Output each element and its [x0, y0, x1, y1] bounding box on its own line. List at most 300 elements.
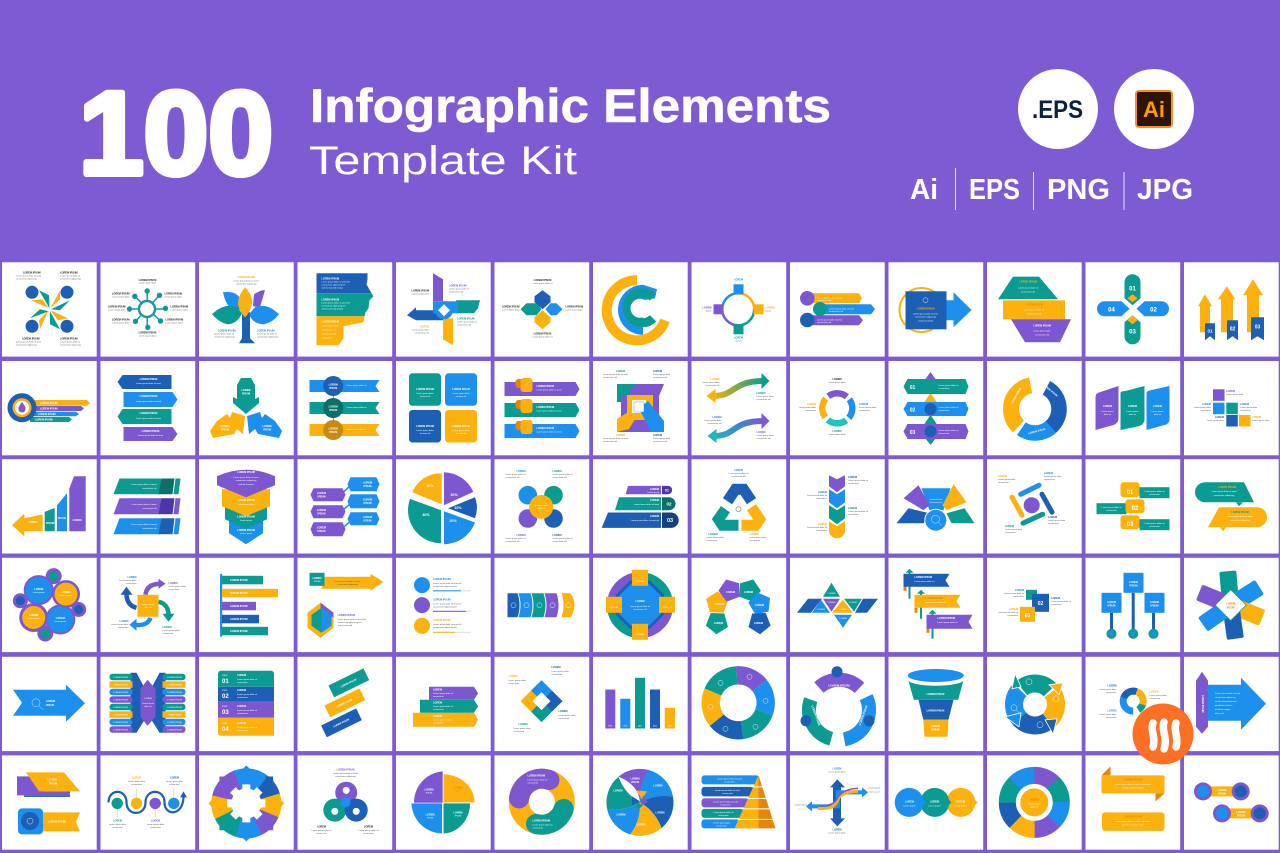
panel: four arc ring: [790, 361, 885, 455]
labels: dolor sit: [144, 705, 152, 708]
diagram: [120, 579, 174, 631]
panel: three rising arrows: [1184, 262, 1279, 357]
numbers: [1207, 324, 1260, 333]
captions: LOREM: [508, 675, 518, 678]
captions: Lorem ipsum dolor: [756, 434, 774, 437]
captions: LOREM IPSUM: [416, 388, 434, 391]
captions: consectetur: [706, 539, 718, 542]
captions: LOREM IPSUM: [536, 427, 554, 430]
labels: consectetur: [1051, 603, 1062, 606]
captions: [1099, 684, 1167, 719]
labels: LOREM IPSUM: [340, 678, 357, 689]
captions: Lorem ipsum: [1126, 410, 1139, 413]
diagram: [900, 288, 972, 332]
captions: LOREM: [516, 534, 526, 537]
captions: Lorem ipsum dolor sit: [346, 428, 367, 431]
chart: ring: [816, 387, 858, 429]
panel: overlapping squares: [987, 558, 1082, 652]
captions: LOREM: [832, 767, 842, 770]
captions: LOREM: [712, 416, 722, 419]
captions: Lorem ipsum: [535, 504, 547, 507]
captions: Lorem ipsum dolor sit amet: [136, 417, 161, 420]
labels: LOREM IPSUM: [230, 618, 248, 621]
labels: LOREM IPSUM: [927, 693, 944, 696]
captions: sit amet elit: [420, 395, 431, 398]
captions: Lorem ipsum: [1151, 410, 1164, 413]
caption: sed do eiusmod: [918, 320, 934, 322]
labels: LOREM: [1107, 601, 1116, 604]
captions: [1194, 390, 1270, 422]
captions: consectetur adipiscing elit: [433, 585, 457, 588]
captions: LOREM: [766, 306, 775, 309]
labels: consectetur: [938, 432, 950, 435]
panel: circle with four bars: [987, 459, 1082, 554]
captions: consectetur elit: [143, 527, 157, 530]
labels: consectetur: [1106, 509, 1117, 512]
captions: Lorem ipsum dolor sit amet: [131, 503, 157, 506]
captions: consectetur: [1044, 478, 1055, 481]
captions: [1018, 280, 1051, 336]
numbers: 03: [1255, 324, 1260, 330]
labels: 01: [1127, 490, 1134, 496]
center label: IPSUM: [1227, 606, 1235, 609]
values: [608, 725, 672, 727]
labels: [424, 786, 463, 819]
panel: three overlapping circles: [888, 755, 983, 850]
captions: LOREM: [848, 507, 857, 510]
labels: LOREM: [237, 705, 246, 708]
diagram: [310, 477, 380, 536]
captions: consectetur elit: [552, 476, 567, 479]
panel: exploded pie chart: [396, 459, 491, 554]
captions: Lorem ipsum dolor sit: [848, 479, 868, 482]
diagram: [895, 788, 978, 817]
labels: Lorem ipsum dolor sit: [1145, 522, 1165, 525]
captions: Lorem ipsum dolor sit: [938, 621, 958, 624]
captions: [322, 277, 350, 339]
captions: consectetur: [1200, 409, 1211, 412]
labels: consectetur: [722, 792, 733, 795]
captions: Lorem ipsum dolor sit: [528, 778, 548, 781]
labels: [910, 384, 959, 436]
captions: LOREM IPSUM: [170, 305, 188, 308]
labels: LOREM: [47, 778, 57, 781]
labels: Lorem ipsum dolor sit: [237, 678, 257, 681]
labels: consectetur: [1013, 595, 1024, 598]
captions: LOREM: [1107, 709, 1116, 712]
captions: Lorem ipsum dolor sit: [433, 718, 453, 721]
captions: consectetur elit: [732, 475, 746, 478]
panel: circle cluster: [2, 558, 97, 652]
panel: trapezoid with circle: [888, 459, 983, 554]
chart: donut: [512, 772, 571, 831]
labels: LOREM IPSUM: [167, 729, 182, 731]
captions: consectetur elit: [1035, 333, 1049, 336]
numbers: 02: [1230, 326, 1235, 332]
labels: LOREM IPSUM: [113, 684, 128, 686]
labels: [714, 591, 764, 625]
captions: [508, 666, 576, 733]
captions: consectetur elit: [653, 440, 667, 443]
captions: [536, 385, 562, 434]
captions: LOREM IPSUM: [1025, 303, 1043, 306]
diagram: gradient arrows: [706, 373, 770, 443]
captions: Ipsum: [706, 310, 712, 312]
captions: LOREM: [807, 403, 816, 406]
diagram: [904, 569, 972, 639]
diagram: [797, 583, 878, 628]
captions: LOREM IPSUM: [22, 337, 40, 340]
captions: LOREM IPSUM: [35, 418, 53, 422]
panel: three arrows in triangle: [199, 361, 294, 455]
captions: consectetur elit: [506, 540, 520, 543]
chart: C arcs: [607, 280, 665, 340]
captions: consectetur: [169, 783, 180, 786]
captions: LOREM: [56, 617, 65, 620]
diagram: [504, 378, 580, 438]
captions: Lorem ipsum dolor: [558, 714, 576, 717]
captions: LOREM IPSUM: [142, 430, 159, 433]
chart: bars: [12, 476, 86, 536]
diagram: [606, 570, 675, 640]
diagram: [702, 775, 776, 828]
captions: Lorem ipsum dolor sit: [807, 526, 827, 529]
panel: nested square with arrows: [593, 361, 688, 455]
labels: LOREM IPSUM: [230, 579, 248, 582]
captions: LOREM IPSUM: [1019, 280, 1037, 283]
center label: dolor sit: [1031, 805, 1038, 808]
captions: Lorem ipsum dolor sit amet: [536, 410, 562, 412]
captions: LOREM: [750, 533, 759, 536]
captions: [799, 378, 877, 436]
labels: LOREM: [754, 622, 763, 625]
labels: LOREM: [630, 777, 640, 780]
captions: consectetur adipiscing elit: [338, 621, 362, 624]
diagram: [1096, 482, 1170, 530]
captions: consectetur elit: [756, 398, 771, 401]
labels: LOREM IPSUM: [1201, 695, 1204, 713]
diagram: [413, 687, 478, 727]
captions: consectetur: [805, 409, 816, 412]
labels: consectetur: [1149, 525, 1160, 528]
panel: big arrow with vertical label: [1184, 657, 1279, 751]
diagram: [718, 489, 760, 525]
labels: LOREM IPSUM: [167, 707, 182, 709]
captions: [807, 476, 868, 532]
captions: Lorem ipsum dolor sit: [312, 829, 332, 832]
labels: IPSUM: [49, 782, 57, 785]
labels: [230, 579, 248, 633]
captions: sed do eiusmod tempor: [1122, 786, 1144, 789]
diagram: [998, 277, 1071, 342]
labels: [1217, 789, 1246, 817]
captions: LOREM IPSUM: [528, 774, 545, 777]
captions: LOREM IPSUM: [322, 277, 339, 280]
captions: Lorem ipsum dolor sit amet: [603, 437, 628, 440]
captions: consectetur: [363, 832, 374, 835]
panel: hub and spokes: [100, 262, 195, 357]
panel: three slanted cards: [1086, 361, 1180, 455]
captions: Lorem ipsum dolor sit amet: [1227, 515, 1253, 518]
labels: LOREM IPSUM: [230, 605, 248, 608]
captions: LOREM: [1202, 403, 1211, 406]
captions: Lorem ipsum: [868, 790, 880, 793]
center label: [1226, 602, 1235, 609]
captions: LOREM: [616, 370, 625, 373]
panel: six pentagons: [692, 558, 786, 652]
captions: LOREM IPSUM: [140, 395, 157, 398]
captions: LOREM: [241, 389, 251, 392]
captions: consectetur: [126, 582, 137, 585]
captions: [329, 384, 367, 434]
labels: 03: [222, 710, 229, 716]
captions: LOREM IPSUM: [237, 499, 255, 502]
labels: LOREM: [1129, 581, 1138, 584]
labels: LOREM: [144, 698, 152, 700]
captions: LOREM IPSUM: [536, 406, 554, 409]
labels: LOREM: [650, 515, 659, 518]
diagram: [1005, 674, 1065, 734]
labels: LOREM: [363, 516, 372, 519]
header: [79, 68, 1194, 210]
chart: wheel: [208, 765, 284, 841]
captions: IPSUM: [329, 387, 337, 390]
panel: concentric target bars: [2, 361, 97, 455]
labels: 03: [667, 518, 673, 524]
captions: LOREM: [956, 800, 965, 803]
numbers: 02: [1150, 307, 1157, 313]
labels: consectetur: [237, 712, 248, 715]
captions: LOREM: [1150, 690, 1159, 693]
captions: Lorem ipsum dolor: [162, 629, 180, 632]
labels: LOREM: [363, 482, 372, 485]
panel: four hexagon arrows: [494, 262, 589, 357]
captions: Lorem ipsum dolor: [998, 478, 1016, 481]
labels: LOREM IPSUM: [167, 722, 182, 724]
badge: orange logo: [1132, 704, 1194, 764]
labels: LOREM: [655, 811, 665, 814]
captions: LOREM IPSUM: [1218, 486, 1236, 489]
panel: offset quadrant pie: [396, 755, 491, 850]
labels: 03: [1127, 522, 1134, 528]
labels: IPSUM: [58, 517, 66, 520]
diagram: [1012, 485, 1052, 523]
captions: Ipsum: [766, 310, 771, 312]
captions: consectetur adipiscing elit: [433, 605, 457, 608]
captions: consectetur elit: [449, 290, 463, 293]
labels: [47, 778, 66, 823]
labels: [817, 593, 857, 620]
captions: LOREM: [516, 470, 526, 473]
captions: consectetur: [1150, 697, 1161, 700]
diagram: [617, 384, 664, 432]
panel: growing bars with arrow: [2, 459, 97, 554]
captions: LOREM: [433, 701, 442, 704]
labels: LOREM IPSUM: [113, 677, 128, 679]
labels: LOREM: [425, 813, 435, 816]
labels: LOREM: [839, 618, 847, 620]
captions: [903, 800, 967, 807]
captions: LOREM IPSUM: [534, 279, 551, 282]
captions: Lorem ipsum dolor: [139, 334, 156, 337]
panel: two S arrows: [692, 361, 786, 455]
captions: LOREM: [610, 607, 618, 609]
captions: Lorem ipsum dolor sit amet elit: [338, 618, 366, 621]
captions: LOREM: [708, 533, 718, 536]
captions: Lorem ipsum dolor: [1005, 528, 1023, 531]
label: LOREM: [46, 700, 55, 703]
diagram: head: [316, 273, 374, 345]
captions: LOREM IPSUM: [452, 425, 470, 428]
labels: [333, 678, 357, 729]
diagram: [1097, 274, 1169, 344]
captions: Lorem ipsum dolor sit: [532, 823, 553, 826]
captions: LOREM IPSUM: [322, 298, 339, 301]
captions: Lorem ipsum dolor sit amet elit: [322, 301, 350, 304]
labels: Lorem ipsum dolor sit: [1004, 592, 1024, 595]
labels: LOREM: [317, 509, 326, 512]
labels: LOREM: [453, 786, 463, 789]
diagram: [118, 375, 178, 441]
diagram: hub: [127, 288, 168, 330]
captions: LOREM IPSUM: [140, 378, 157, 381]
diagram: [13, 568, 86, 642]
captions: consectetur adipiscing: [1230, 519, 1251, 522]
captions: LOREM: [832, 378, 842, 381]
captions: LOREM: [636, 634, 644, 636]
captions: Lorem ipsum dolor sit amet: [233, 279, 259, 282]
labels: [1102, 490, 1165, 528]
labels: incididunt ut labore: [1215, 704, 1233, 707]
captions: Lorem ipsum: [903, 804, 916, 807]
captions: Lorem ipsum dolor: [828, 770, 846, 773]
panel: four tag bars: [100, 361, 195, 455]
panel: three trapezoids: [987, 262, 1082, 357]
captions: LOREM: [710, 378, 720, 381]
captions: Lorem ipsum: [1101, 410, 1114, 413]
captions: Ipsum: [736, 340, 742, 342]
captions: LOREM: [552, 666, 561, 669]
captions: LOREM: [518, 723, 528, 726]
captions: LOREM IPSUM: [166, 318, 183, 321]
panel: butterfly pill lists: [100, 657, 195, 751]
captions: LOREM IPSUM: [23, 271, 41, 274]
captions: consectetur: [1005, 531, 1016, 534]
captions: Lorem ipsum dolor: [704, 419, 722, 422]
values: 20%: [623, 725, 628, 727]
labels: LOREM: [726, 591, 735, 594]
diagram: [896, 484, 974, 531]
captions: consectetur adipiscing elit: [322, 283, 346, 286]
labels: STEP: [222, 675, 228, 677]
labels: LOREM: [755, 604, 764, 607]
captions: LOREM: [329, 428, 338, 430]
labels: Lorem ipsum dolor sit: [1051, 600, 1071, 603]
captions: LOREM: [317, 825, 326, 828]
title: Infographic Elements: [310, 80, 831, 133]
captions: LOREM: [220, 425, 230, 428]
labels: Lorem ipsum dolor sit: [938, 384, 959, 387]
labels: LOREM IPSUM: [230, 630, 248, 633]
captions: LOREM: [34, 588, 43, 591]
panel: stacked shield funnel: [199, 459, 294, 554]
captions: Lorem ipsum dolor sit amet elit: [322, 280, 350, 283]
labels: consectetur: [938, 409, 950, 412]
panel: donut chart: [692, 657, 786, 751]
captions: consectetur: [112, 826, 123, 829]
captions: LOREM: [151, 819, 160, 822]
captions: consectetur adipiscing: [335, 775, 357, 778]
captions: Lorem ipsum dolor: [170, 308, 188, 311]
captions: LOREM IPSUM: [914, 576, 932, 579]
labels: LOREM IPSUM: [113, 699, 128, 701]
captions: Lorem ipsum dolor: [119, 579, 137, 582]
center label: LOREM: [1226, 602, 1235, 605]
diagram: [414, 577, 471, 634]
badge: EPS: [1018, 69, 1098, 149]
labels: IPSUM: [318, 513, 325, 516]
captions: LOREM IPSUM: [534, 332, 551, 335]
values: 30%: [653, 725, 657, 727]
dots: [800, 666, 874, 726]
captions: consectetur elit: [457, 323, 471, 326]
captions: consectetur adipiscing: [337, 583, 359, 586]
captions: consectetur adipiscing: [236, 282, 257, 285]
labels: LOREM: [1009, 608, 1018, 611]
captions: LOREM: [734, 278, 743, 281]
chart: pie: [412, 771, 474, 833]
labels: Lorem ipsum dolor sit: [1102, 506, 1122, 509]
captions: consectetur: [552, 673, 563, 676]
labels: IPSUM: [455, 815, 462, 817]
panel: banner arrow and hexagon: [298, 558, 392, 652]
labels: LOREM: [715, 603, 724, 606]
captions: IPSUM: [221, 428, 229, 432]
captions: consectetur: [848, 482, 859, 485]
captions: Lorem ipsum dolor: [416, 429, 434, 432]
panel: big blue arrow: [2, 657, 97, 751]
captions: [411, 284, 477, 334]
diagram: [321, 668, 369, 737]
captions: Lorem ipsum dolor: [502, 308, 520, 311]
captions: Lorem ipsum dolor: [168, 585, 186, 588]
labels: LOREM: [317, 492, 326, 495]
captions: Lorem ipsum dolor: [1207, 419, 1224, 422]
panel: stepped arrows: [396, 657, 491, 751]
labels: STEP: [222, 690, 228, 692]
labels: 01: [910, 385, 915, 391]
labels: Lorem ipsum dolor sit: [938, 429, 959, 432]
captions: dolor sit: [1104, 413, 1112, 416]
captions: Lorem ipsum dolor sit: [359, 829, 379, 832]
captions: [1211, 486, 1253, 522]
captions: LOREM: [168, 582, 178, 585]
diagram: [323, 782, 368, 822]
arc labels: LOREM IPSUM: [828, 683, 850, 687]
captions: consectetur adipiscing: [16, 343, 37, 346]
captions: LOREM IPSUM: [433, 578, 451, 581]
captions: LOREM: [329, 384, 338, 386]
captions: Lorem ipsum dolor sit amet: [333, 772, 358, 775]
arc labels: [810, 683, 869, 727]
labels: [317, 482, 372, 533]
captions: LOREM IPSUM: [164, 292, 182, 295]
panel: diamond ring: [494, 657, 589, 751]
captions: Lorem ipsum dolor: [111, 623, 129, 626]
percentages: 10%: [454, 506, 462, 510]
diagram: cross: [520, 290, 562, 329]
panel: numbered yellow tabs: [1086, 459, 1180, 554]
